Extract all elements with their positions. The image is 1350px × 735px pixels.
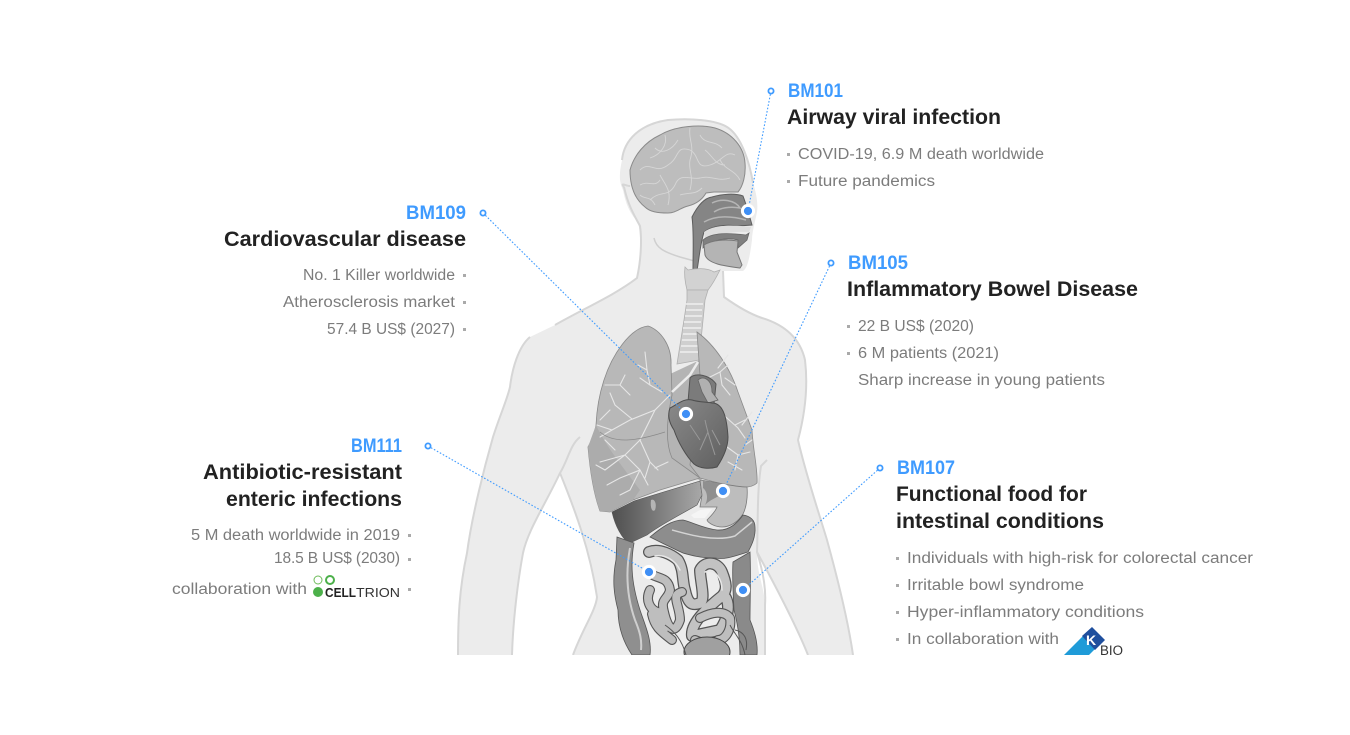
marker: BM111 small intestine: [425, 443, 655, 578]
panel: BM111 antibiotic-resistant enteric infections: [172, 436, 411, 600]
BM105 heading: Inflammatory Bowel Disease: [847, 278, 1138, 301]
BM111 code: BM111: [351, 436, 402, 457]
panel: BM101 airway viral infection: [787, 81, 1044, 190]
BM109 list: [283, 267, 466, 338]
BM101 list: [787, 146, 1044, 190]
marker: BM105 upper gut: [717, 260, 834, 497]
BM107 list: Hyper-inflammatory conditions: [907, 604, 1144, 621]
BM111 heading: [203, 461, 402, 511]
BM107 list: [896, 550, 1253, 648]
BM107 code: BM107: [897, 458, 955, 479]
stomach: [691, 480, 747, 527]
BM107 heading: [896, 483, 1104, 533]
BM109 code: BM109: [406, 203, 466, 224]
BM111 heading: Antibiotic-resistant: [203, 461, 402, 484]
BM101 list: COVID-19, 6.9 M death worldwide: [798, 146, 1044, 163]
BM107 heading: intestinal conditions: [896, 510, 1104, 533]
logo: Celltrion: TRION: [356, 585, 400, 600]
transverse colon: [650, 515, 755, 559]
leader lines: [428, 91, 880, 590]
larynx and trachea: [677, 267, 720, 364]
anatomical figure: [458, 119, 853, 667]
marker: BM109 heart: [480, 210, 692, 420]
BM105 list: Sharp increase in young patients: [858, 372, 1105, 389]
logo: Celltrion: [313, 576, 400, 600]
BM107 list: Irritable bowl syndrome: [907, 577, 1084, 594]
liver: [612, 481, 702, 543]
BM109 list: Atherosclerosis market: [283, 294, 456, 311]
BM101 list: Future pandemics: [798, 173, 935, 190]
bladder: [664, 624, 748, 655]
panel: BM105 inflammatory bowel disease: [847, 253, 1138, 389]
BM101 heading: Airway viral infection: [787, 106, 1001, 129]
BM107 list: Individuals with high-risk for colorectal cancer: [907, 550, 1253, 567]
heart: [669, 375, 728, 468]
BM109 list: No. 1 Killer worldwide: [303, 267, 455, 284]
ascending and descending colon: [614, 537, 757, 655]
BM109 list: 57.4 B US$ (2027): [327, 321, 455, 338]
BM107 list: In collaboration with: [907, 631, 1059, 648]
lungs: [588, 326, 757, 512]
small intestine: [648, 551, 730, 650]
BM111 heading: enteric infections: [226, 488, 402, 511]
BM111 list: 18.5 B US$ (2030): [274, 550, 400, 567]
logo: K BIO: K: [1086, 632, 1096, 648]
body silhouette: [458, 119, 853, 655]
logo: K BIO: BIO: [1100, 643, 1123, 658]
BM111 list: collaboration with: [172, 581, 307, 598]
nasal cavity and mouth: [692, 194, 752, 270]
BM105 code: BM105: [848, 253, 908, 274]
logo: K BIO: [1064, 627, 1123, 658]
panel: BM109 cardiovascular disease: [224, 203, 466, 338]
panel: BM107 functional food: [896, 458, 1253, 658]
BM105 list: [847, 318, 1105, 389]
BM107 heading: Functional food for: [896, 483, 1087, 506]
marker: BM107 colon: [737, 465, 883, 596]
marker: BM101 nasal: [742, 88, 774, 217]
BM111 list: 5 M death worldwide in 2019: [191, 527, 400, 544]
BM105 list: 6 M patients (2021): [858, 345, 999, 362]
BM109 heading: Cardiovascular disease: [224, 228, 466, 251]
BM101 code: BM101: [788, 81, 843, 102]
BM111 list: [172, 527, 411, 598]
logo: Celltrion: CELL: [325, 585, 356, 600]
BM105 list: 22 B US$ (2020): [858, 318, 974, 335]
brain: [630, 126, 745, 213]
